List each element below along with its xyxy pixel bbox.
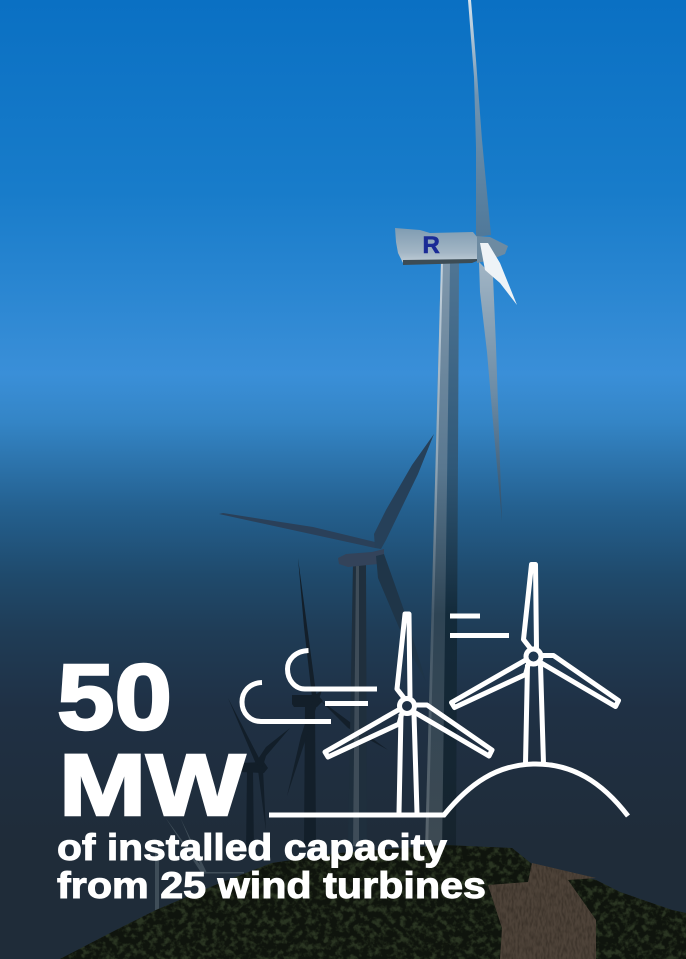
icon: ground and hill line — [269, 764, 628, 816]
photo: hill — [60, 845, 686, 959]
photo: nacelle logo: R — [422, 232, 440, 259]
headline: 50 MW — [57, 645, 246, 834]
photo: main turbine blade, lower — [479, 262, 502, 522]
photo: white blade — [480, 243, 517, 305]
photo: nacelle — [395, 228, 508, 265]
icon: wind turbines on hills — [242, 564, 628, 816]
photo: main turbine tower — [425, 262, 459, 852]
photo: far turbine — [228, 698, 290, 855]
subheading: capacity and turbines — [57, 827, 486, 906]
photo: dirt road — [488, 863, 596, 959]
icon: wind gusts — [242, 616, 509, 722]
photo: second turbine — [219, 434, 434, 847]
icon: left turbine — [325, 614, 492, 813]
subheading: capacity and turbines: from 25 wind turbines — [57, 865, 486, 906]
subheading: capacity and turbines: of installed capacity — [57, 827, 447, 868]
photo: third turbine — [287, 558, 388, 846]
headline: 50 MW: 50 — [57, 645, 172, 749]
icon: right turbine — [452, 564, 618, 764]
photo: distant small turbine — [155, 817, 244, 913]
photo: main turbine blade, upper — [468, 0, 491, 237]
headline: 50 MW: MW — [59, 737, 246, 834]
